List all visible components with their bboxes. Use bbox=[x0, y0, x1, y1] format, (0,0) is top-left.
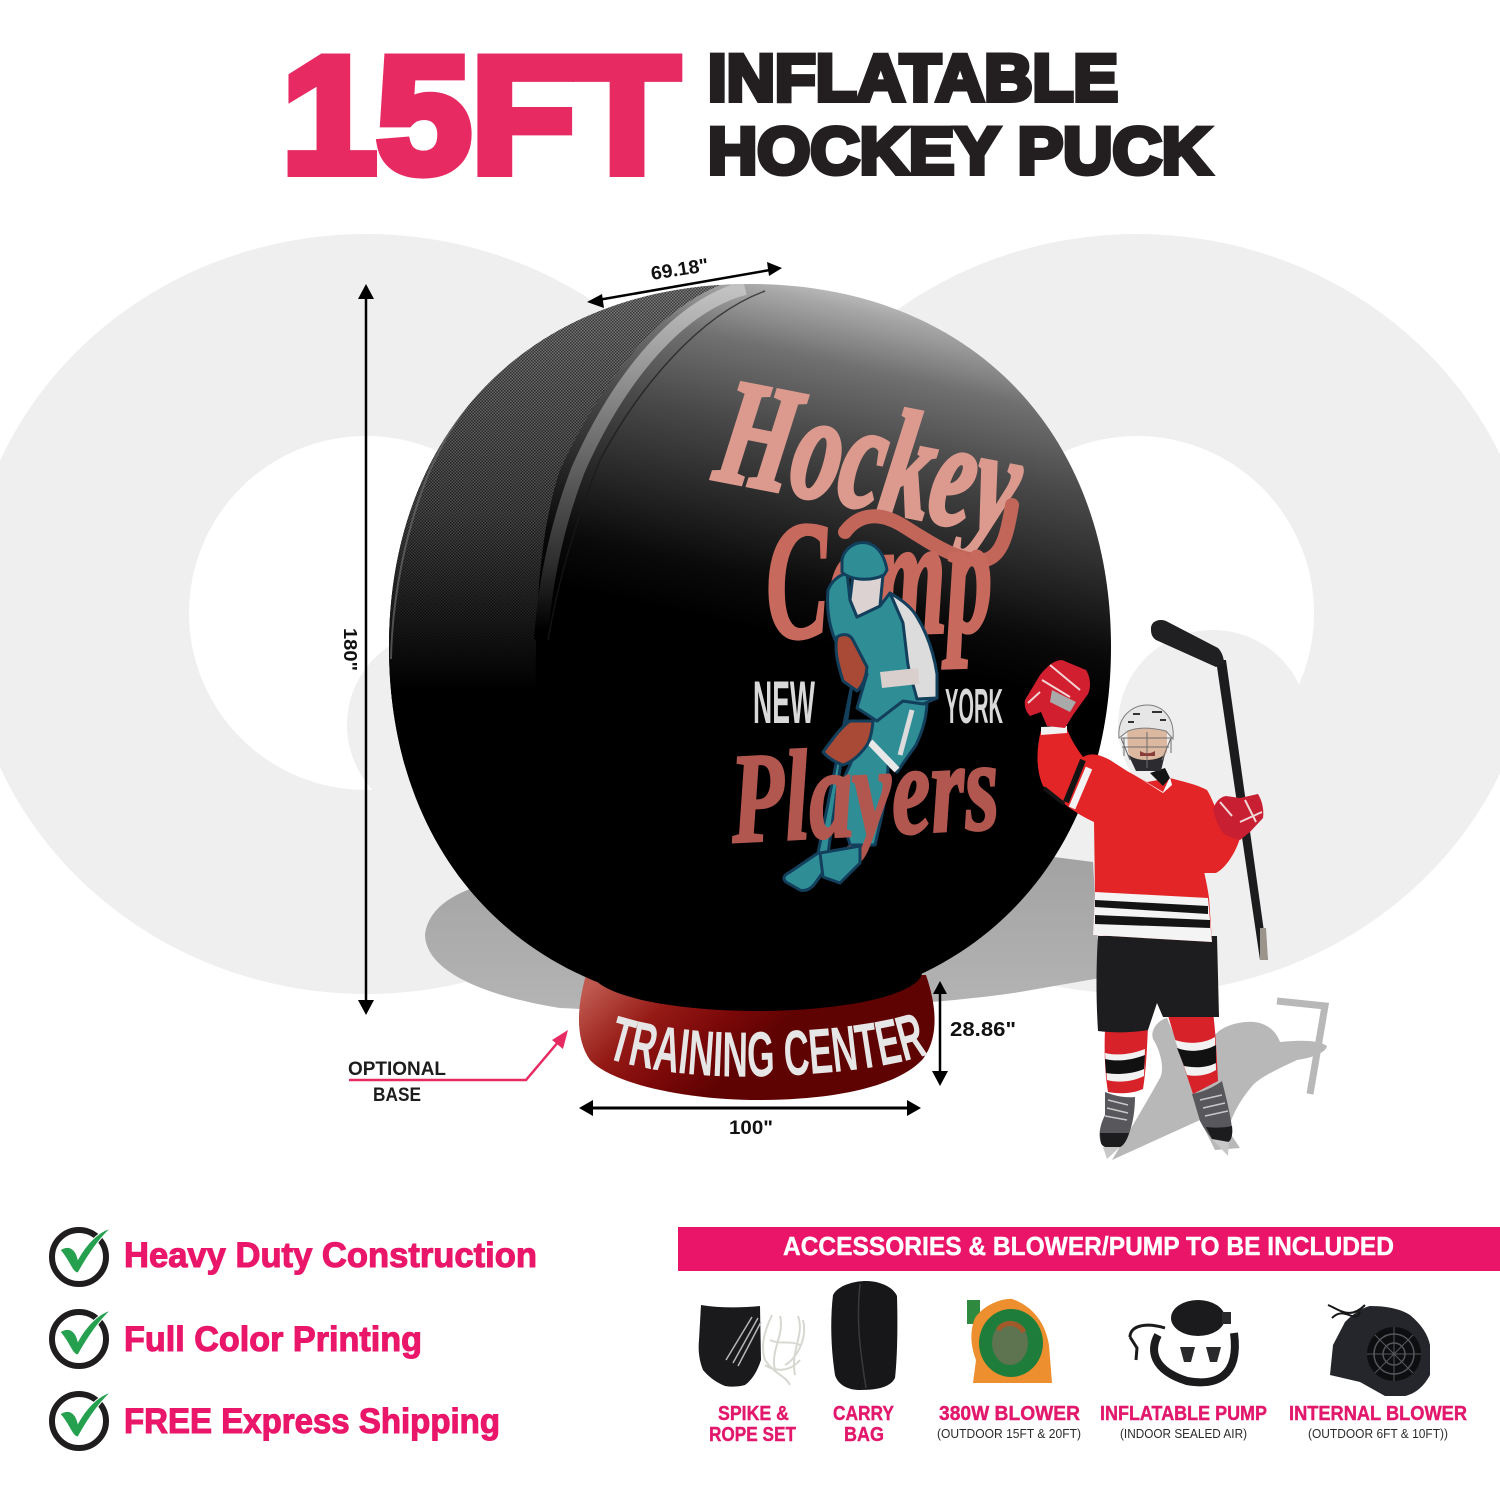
hockey stick bbox=[1151, 620, 1268, 960]
puck side band bbox=[389, 284, 766, 768]
label: spike and rope set: ROPE SET bbox=[709, 1424, 796, 1446]
logo word: Hockey: Hockey bbox=[704, 347, 1036, 568]
callout: optional base: BASE bbox=[373, 1085, 421, 1106]
base lettering: TRAINING CENTER bbox=[614, 1014, 928, 1077]
label: internal blower: (OUTDOOR 6FT & 10FT)) bbox=[1308, 1426, 1448, 1441]
callout: optional base bbox=[348, 1030, 568, 1106]
hockey player photo illustration bbox=[1025, 620, 1327, 1160]
label: carry bag bbox=[833, 1403, 895, 1446]
dimension: height 180 bbox=[340, 284, 374, 1015]
player shadow bbox=[1112, 1001, 1327, 1160]
logo swash bbox=[845, 505, 1012, 560]
background: grey ring shapes bbox=[0, 234, 1500, 994]
label: carry bag: CARRY bbox=[833, 1403, 895, 1425]
label: inflatable pump: (INDOOR SEALED AIR) bbox=[1120, 1426, 1247, 1441]
puck ground shadow bbox=[425, 850, 1100, 1011]
title bbox=[282, 23, 1211, 207]
feature: full color printing bbox=[52, 1310, 422, 1366]
feature: full color printing: Full Color Printing bbox=[124, 1320, 422, 1359]
left leg bbox=[1100, 1026, 1148, 1159]
logo skater bbox=[784, 542, 937, 891]
icon: inflatable pump bbox=[1130, 1300, 1235, 1382]
right leg bbox=[1167, 1012, 1232, 1156]
logo word: Players: Players bbox=[726, 714, 1002, 870]
lower glove bbox=[1213, 794, 1263, 840]
inflatable puck bbox=[370, 260, 1111, 1011]
raised glove bbox=[1025, 660, 1090, 728]
label: internal blower bbox=[1289, 1403, 1467, 1441]
accessories banner: ACCESSORIES & BLOWER/PUMP TO BE INCLUDED bbox=[783, 1231, 1394, 1261]
label: 380W blower: 380W BLOWER bbox=[939, 1403, 1081, 1425]
accessories banner bbox=[678, 1227, 1500, 1271]
dimension: base width 100: 100" bbox=[729, 1118, 773, 1139]
puck graphic: Hockey Camp Players logo: YORK bbox=[945, 680, 1003, 734]
label: spike and rope set: SPIKE & bbox=[718, 1403, 789, 1425]
feature: free express shipping bbox=[52, 1392, 500, 1448]
accessories panel bbox=[678, 1227, 1500, 1446]
dimension: base height 28.86 bbox=[932, 981, 1016, 1086]
label: spike and rope set bbox=[709, 1403, 796, 1446]
jersey bbox=[1037, 726, 1240, 942]
feature: heavy duty construction: Heavy Duty Construction bbox=[124, 1236, 537, 1275]
icon: spike and rope set bbox=[699, 1305, 804, 1387]
callout: optional base: OPTIONAL bbox=[348, 1059, 446, 1080]
logo word: Camp: Camp bbox=[763, 481, 995, 675]
dimension: depth 69.18 bbox=[587, 255, 782, 308]
dimension: base width 100 bbox=[579, 1100, 921, 1139]
shorts bbox=[1096, 936, 1219, 1032]
puck graphic: Hockey Camp Players logo bbox=[704, 347, 1036, 891]
feature list bbox=[52, 1228, 537, 1448]
optional base bbox=[578, 975, 935, 1100]
label: inflatable pump bbox=[1100, 1403, 1267, 1441]
label: internal blower: INTERNAL BLOWER bbox=[1289, 1403, 1467, 1425]
title: size: 15FT bbox=[282, 23, 679, 207]
icon: 380W blower bbox=[967, 1299, 1052, 1383]
label: carry bag: BAG bbox=[844, 1424, 884, 1446]
feature: heavy duty construction bbox=[52, 1228, 537, 1284]
label: 380W blower bbox=[937, 1403, 1081, 1441]
dimension: depth 69.18: 69.18" bbox=[649, 255, 710, 285]
feature: free express shipping: FREE Express Shipping bbox=[124, 1402, 500, 1441]
dimension: base height 28.86: 28.86" bbox=[950, 1019, 1016, 1041]
dimension: height 180: 180" bbox=[340, 628, 360, 671]
label: inflatable pump: INFLATABLE PUMP bbox=[1100, 1403, 1267, 1425]
icon: internal blower bbox=[1328, 1305, 1430, 1396]
puck graphic: Hockey Camp Players logo: NEW bbox=[753, 669, 815, 736]
icon: carry bag bbox=[831, 1281, 897, 1390]
title: product line two: HOCKEY PUCK bbox=[708, 114, 1211, 188]
logo skater skate bbox=[820, 846, 860, 883]
label: 380W blower: (OUTDOOR 15FT & 20FT) bbox=[937, 1426, 1081, 1441]
title: product line one: INFLATABLE bbox=[708, 40, 1118, 114]
head and helmet bbox=[1119, 705, 1173, 771]
